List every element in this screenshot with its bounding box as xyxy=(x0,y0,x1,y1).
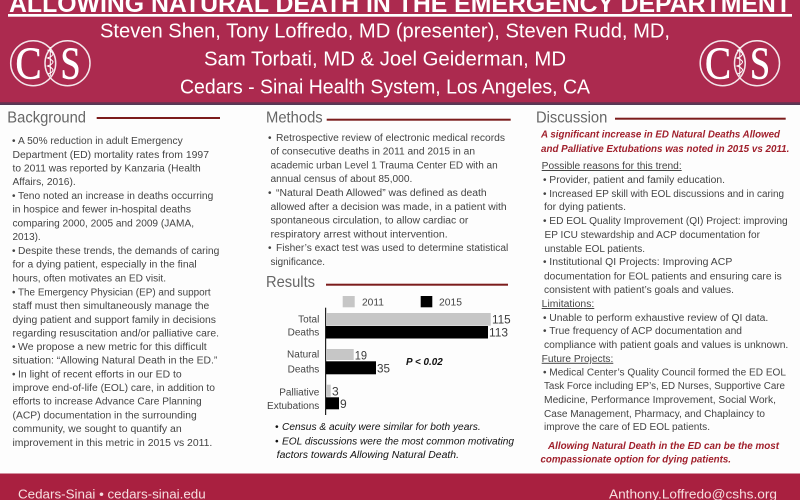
background text: Teno noted an increase in deaths occurring xyxy=(18,191,213,202)
panel: discussion xyxy=(536,110,789,465)
methods text: annual census of about 85,000. xyxy=(270,174,412,185)
future projects: Case Management, Pharmacy, and Chaplaincy to xyxy=(544,409,765,420)
methods text: spontaneous circulation, to allow cardiac or xyxy=(270,216,469,226)
methods text: “Natural Death Allowed” was defined as death xyxy=(276,188,487,199)
background text: comparing 2000, 2005 and 2009 (JAMA, xyxy=(12,218,194,230)
background text: to 2011 was reported by Kanzaria (Health xyxy=(12,164,201,174)
limitations: True frequency of ACP documentation and xyxy=(549,326,742,337)
bars: natural deaths: Natural xyxy=(287,350,319,361)
background text: The Emergency Physician (EP) and support xyxy=(18,288,211,298)
background text: • xyxy=(12,288,16,298)
possible reasons: • xyxy=(543,189,547,200)
results notes: EOL discussions were the most common motivating xyxy=(282,436,514,447)
background text: (ACP) documentation in the surrounding xyxy=(12,410,197,422)
results notes: • xyxy=(275,436,279,447)
possible reasons: ED EOL Quality Improvement (QI) Project: improving xyxy=(549,216,788,227)
possible reasons: documentation for EOL patients and ensuring care is xyxy=(544,272,782,282)
future projects: Medicine, Performance Improvement, Social Work, xyxy=(544,395,776,406)
bars: palliative extubations: Extubations xyxy=(267,401,319,412)
future projects: • xyxy=(543,368,547,378)
background text: improvement in this metric in 2015 vs 2011. xyxy=(12,438,212,449)
future projects: Future Projects: xyxy=(542,354,613,365)
heading: discussion: Discussion xyxy=(536,110,607,127)
possible reasons xyxy=(542,161,788,296)
methods text: of consecutive deaths in 2011 and 2015 in an xyxy=(270,146,475,158)
background text: community, we sought to quantify an xyxy=(12,424,182,435)
heading: methods: Methods xyxy=(266,110,323,127)
background text: • xyxy=(12,191,16,202)
chart legend xyxy=(343,296,462,309)
bars: natural deaths: Deaths xyxy=(288,364,319,375)
background text: in hospice and fewer in-hospital deaths xyxy=(12,204,191,216)
background text: dying patient and support family in decisions xyxy=(12,315,216,326)
bars: total deaths: 113 xyxy=(489,326,508,340)
bars: total deaths: Deaths xyxy=(288,328,319,339)
key finding: A significant increase in ED Natural Deaths Allowed xyxy=(540,130,781,141)
methods text: Fisher’s exact test was used to determine statistical xyxy=(276,243,508,254)
limitations: Unable to perform exhaustive review of QI data. xyxy=(549,313,768,324)
heading: results: Results xyxy=(266,274,315,291)
conclusion: compassionate option for dying patients. xyxy=(540,454,731,466)
background text: regarding resuscitation and/or palliative care. xyxy=(12,328,219,340)
future projects: Task Force including EP’s, ED Nurses, Supportive Care xyxy=(544,381,785,392)
bars: total deaths: 115 xyxy=(492,313,511,327)
background text: for a dying patient, especially in the final xyxy=(12,260,197,270)
bars: palliative extubations: 9 xyxy=(340,397,347,411)
possible reasons: Increased EP skill with EOL discussions and in caring xyxy=(549,189,784,200)
panel: results xyxy=(266,274,514,461)
methods text: • xyxy=(268,133,272,144)
methods text: • xyxy=(268,243,272,254)
bars: total deaths xyxy=(288,313,511,340)
possible reasons: • xyxy=(543,175,547,186)
limitations: compliance with patient goals and values is unknown. xyxy=(544,340,788,351)
background text: • xyxy=(12,136,16,147)
background text: situation: “Allowing Natural Death in the ED.” xyxy=(12,356,217,366)
background text: Affairs, 2016). xyxy=(12,177,76,188)
future projects: improve the care of ED EOL patients. xyxy=(544,422,710,433)
background text: improve end-of-life (EOL) care, in addition to xyxy=(12,383,215,394)
background text: hours, often motivates an ED visit. xyxy=(12,274,166,284)
bars: palliative extubations xyxy=(267,384,347,412)
background text: In light of recent efforts in our ED to xyxy=(18,370,182,380)
icon: Cedars-Sinai logo right xyxy=(700,38,780,88)
background text: • xyxy=(12,246,16,257)
limitations: • xyxy=(543,326,547,337)
bars: natural deaths xyxy=(287,349,390,376)
possible reasons: Institutional QI Projects: Improving ACP xyxy=(549,257,733,268)
possible reasons: • xyxy=(543,216,547,227)
methods text xyxy=(268,133,508,268)
icon: Cedars-Sinai logo right: C xyxy=(705,38,731,88)
authors and affiliation xyxy=(100,21,670,98)
methods text: academic urban Level 1 Trauma Center ED with an xyxy=(270,160,498,172)
methods text: allowed after a decision was made, in a patient with xyxy=(270,202,507,213)
bars: natural deaths: 35 xyxy=(377,362,390,376)
background text: efforts to increase Advance Care Planning xyxy=(12,396,202,408)
icon: Cedars-Sinai logo left: C xyxy=(16,38,42,88)
possible reasons: for dying patients. xyxy=(544,202,626,213)
p value: P < 0.02 xyxy=(406,357,443,368)
panel: methods xyxy=(266,110,511,268)
bar chart xyxy=(267,296,511,415)
header banner xyxy=(0,0,800,105)
icon: Cedars-Sinai logo left xyxy=(11,38,90,88)
conclusion: Allowing Natural Death in the ED can be the most xyxy=(547,441,780,452)
authors and affiliation: Steven Shen, Tony Loffredo, MD (presenter), Steven Rudd, MD, xyxy=(100,21,670,43)
possible reasons: Possible reasons for this trend: xyxy=(542,161,682,172)
possible reasons: • xyxy=(543,257,547,268)
icon: Cedars-Sinai logo left: S xyxy=(60,38,80,88)
background text: A 50% reduction in adult Emergency xyxy=(18,136,183,147)
results notes: factors towards Allowing Natural Death. xyxy=(277,450,459,461)
limitations: • xyxy=(543,313,547,324)
possible reasons: consistent with patient’s goals and values. xyxy=(544,285,734,296)
limitations: Limitations: xyxy=(542,299,594,310)
results notes: • xyxy=(275,422,279,433)
key finding: and Palliative Extubations was noted in 2015 vs 2011. xyxy=(541,144,789,155)
key finding xyxy=(540,130,789,155)
future projects: Medical Center’s Quality Council formed the ED EOL xyxy=(549,368,786,378)
heading: background: Background xyxy=(7,110,86,127)
background text: • xyxy=(12,342,16,353)
chart legend: 2011 xyxy=(362,298,384,309)
authors and affiliation: Sam Torbati, MD & Joel Geiderman, MD xyxy=(204,49,566,71)
bars: total deaths: Total xyxy=(298,314,319,325)
results notes: Census & acuity were similar for both years. xyxy=(282,422,481,433)
background text xyxy=(12,136,219,449)
background text: Department (ED) mortality rates from 1997 xyxy=(12,150,209,161)
methods text: respiratory arrest without intervention. xyxy=(270,230,448,240)
background text: We propose a new metric for this difficult xyxy=(18,342,207,353)
icon: Cedars-Sinai logo right: S xyxy=(750,38,770,88)
bars: palliative extubations: Palliative xyxy=(279,387,320,398)
possible reasons: Provider, patient and family education. xyxy=(549,175,725,186)
background text: Despite these trends, the demands of caring xyxy=(18,246,219,257)
methods text: • xyxy=(268,188,272,199)
chart legend: 2015 xyxy=(439,298,462,309)
bars: palliative extubations: 3 xyxy=(332,384,339,398)
results notes xyxy=(275,422,514,461)
panel: background xyxy=(7,110,220,449)
conclusion xyxy=(540,441,780,466)
possible reasons: unstable EOL patients. xyxy=(544,244,645,255)
bars: natural deaths: 19 xyxy=(355,349,367,363)
future projects xyxy=(542,354,786,433)
limitations xyxy=(542,299,788,351)
background text: 2013). xyxy=(12,232,41,243)
background text: • xyxy=(12,370,16,380)
footer xyxy=(0,474,800,500)
authors and affiliation: Cedars - Sinai Health System, Los Angeles, CA xyxy=(180,76,591,98)
background text: staff must then simultaneously manage the xyxy=(12,301,210,312)
methods text: Retrospective review of electronic medical records xyxy=(276,133,505,144)
possible reasons: EP ICU stewardship and ACP documentation for xyxy=(544,230,761,241)
methods text: significance. xyxy=(270,257,325,268)
